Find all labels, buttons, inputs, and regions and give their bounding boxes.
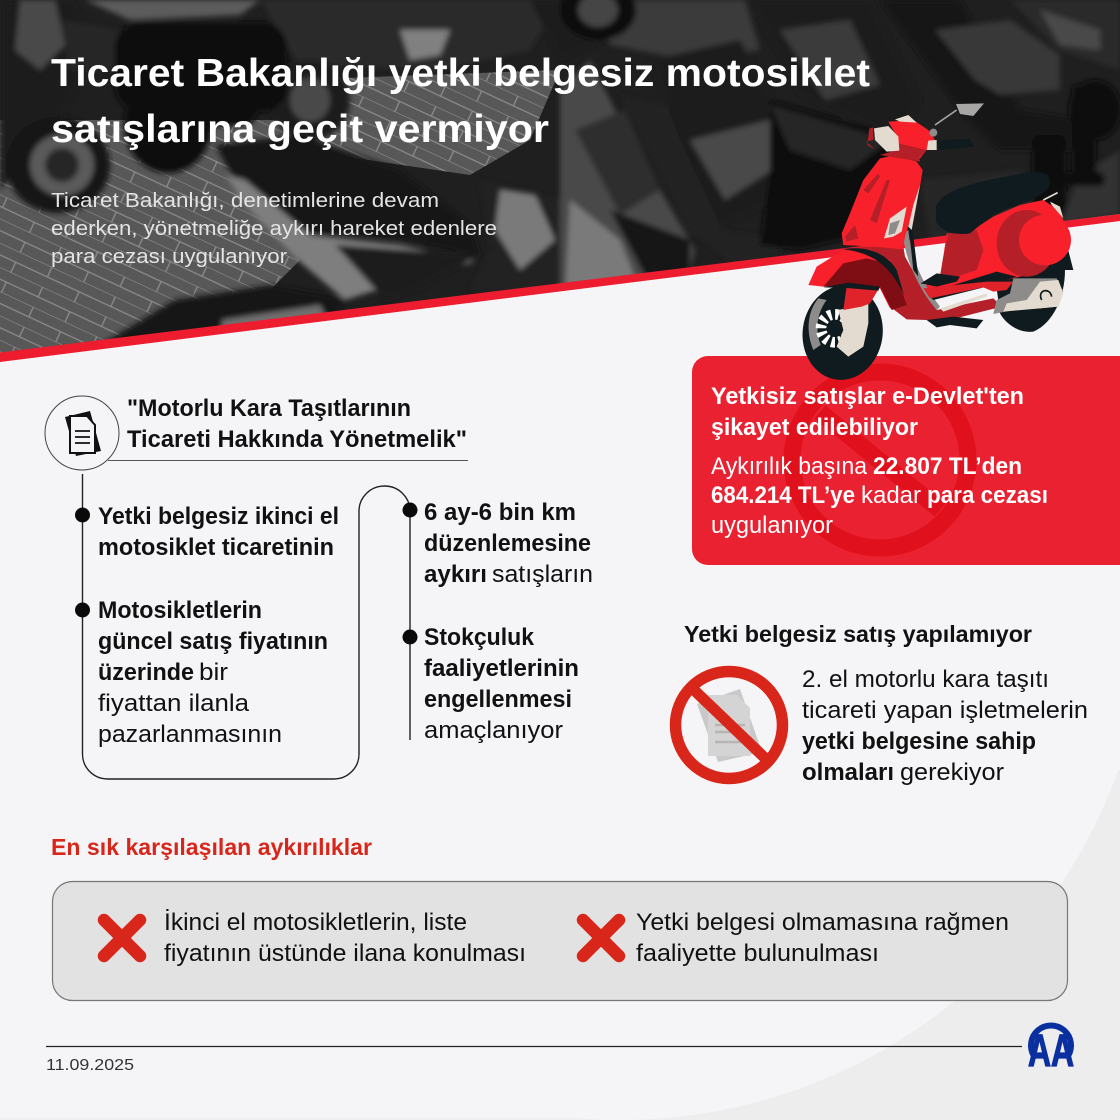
text block: left column: bir (199, 659, 228, 686)
callout heading: şikayet edilebiliyor (711, 414, 918, 441)
text block: left column: pazarlanmasının (98, 721, 282, 748)
text block: left column: motosiklet ticaretinin (98, 534, 334, 561)
date: 11.09.2025 (46, 1057, 134, 1074)
panel: violations box (52, 882, 1068, 1000)
text block: right column: 6 ay-6 bin km (424, 499, 576, 526)
text block: left column (98, 503, 339, 748)
title: Ticaret Bakanlığı yetki belgesiz motosiklet (51, 52, 870, 95)
text block: right column: düzenlemesine (424, 530, 591, 557)
text block: left column: üzerinde (98, 659, 194, 686)
violation text two: faaliyette bulunulması (636, 940, 879, 967)
footer rule (46, 1046, 1022, 1048)
text block: left column: Yetki belgesiz ikinci el (98, 503, 339, 530)
callout body: kadar (861, 482, 921, 509)
heading: no-permit section: Yetki belgesiz satış yapılamıyor (684, 621, 1032, 647)
logo: Anadolu Agency: AA (1028, 1025, 1074, 1076)
callout heading (711, 383, 1024, 441)
subtitle: para cezası uygulanıyor (51, 245, 287, 268)
heading: regulation title (45, 395, 468, 470)
text block: left column: fiyattan ilanla (98, 690, 250, 717)
icon: documents in circle (45, 396, 119, 470)
red diagonal band (0, 214, 1120, 362)
callout heading: Yetkisiz satışlar e-Devlet'ten (711, 383, 1024, 410)
text block: permit requirement: gerekiyor (900, 759, 1004, 786)
text block: permit requirement: yetki belgesine sahip (802, 728, 1036, 755)
icon: red scooter illustration (796, 103, 1073, 385)
violation text two (636, 909, 1009, 967)
subtitle: ederken, yönetmeliğe aykırı hareket edenlere (51, 217, 497, 240)
violation text one: fiyatının üstünde ilana konulması (164, 940, 526, 967)
subtitle (51, 189, 497, 268)
title (51, 52, 870, 151)
callout body: para cezası (927, 482, 1048, 509)
text block: right column: aykırı (424, 561, 487, 588)
subtitle: Ticaret Bakanlığı, denetimlerine devam (51, 189, 439, 212)
icon: red cross two (583, 920, 619, 956)
callout body (711, 453, 1048, 539)
text block: right column: faaliyetlerinin (424, 655, 579, 682)
heading: regulation title: Ticareti Hakkında Yönetmelik" (127, 426, 467, 453)
panel: red penalty callout (692, 356, 1120, 565)
callout body: uygulanıyor (711, 512, 833, 539)
text block: left column: güncel satış fiyatının (98, 628, 328, 655)
heading: common violations: En sık karşılaşılan aykırılıklar (51, 834, 372, 860)
text block: permit requirement: 2. el motorlu kara taşıtı (802, 666, 1049, 693)
icon: prohibited document (676, 672, 782, 778)
text block: permit requirement: olmaları (802, 759, 894, 786)
connector timeline (75, 474, 418, 779)
violation text one (164, 909, 526, 967)
callout body: Aykırılık başına (711, 453, 868, 480)
text block: left column: Motosikletlerin (98, 597, 262, 624)
text block: permit requirement: ticareti yapan işletmelerin (802, 697, 1088, 724)
icon: watermark prohibition sign (792, 372, 968, 548)
heading: regulation title: "Motorlu Kara Taşıtlarının (127, 395, 411, 422)
text block: right column (424, 499, 593, 744)
header photo of parked motorcycles (0, 0, 1120, 370)
text block: right column: Stokçuluk (424, 624, 535, 651)
callout body: 684.214 TL’ye (711, 482, 855, 509)
text block: permit requirement (802, 666, 1088, 786)
violation text two: Yetki belgesi olmamasına rağmen (636, 909, 1009, 936)
icon: red cross one (104, 920, 140, 956)
title: satışlarına geçit vermiyor (51, 108, 549, 151)
violation text one: İkinci el motosikletlerin, liste (164, 909, 467, 936)
callout body: 22.807 TL’den (873, 453, 1022, 480)
text block: right column: amaçlanıyor (424, 717, 563, 744)
text block: right column: satışların (492, 561, 593, 588)
text block: right column: engellenmesi (424, 686, 572, 713)
